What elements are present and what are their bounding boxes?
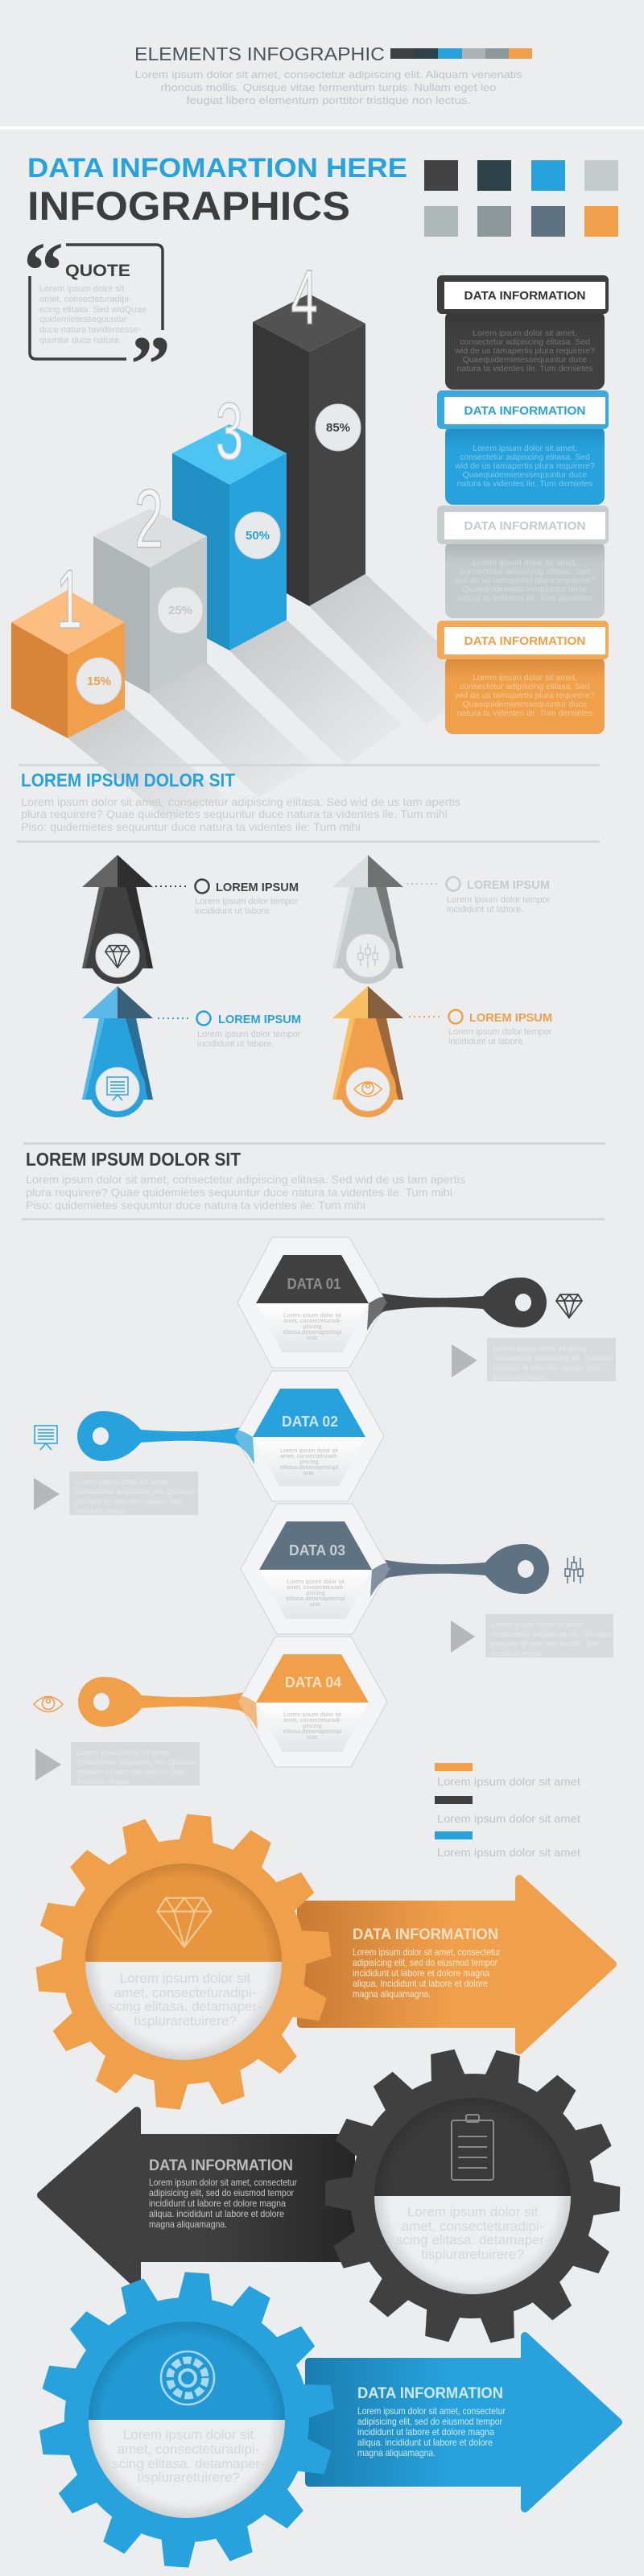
hexagon 4: urar. — [306, 1733, 319, 1740]
header: intro text: feugiat libero elementum porttitor tristique non lectus. — [187, 94, 470, 106]
arrow 4 orange with eye — [332, 986, 403, 1117]
info box 2: Lorem ipsum dolor sit amet, — [75, 1478, 169, 1487]
gear: dark: scing elitasa. detamaper- — [396, 2232, 549, 2248]
arrow: orange data information: magna aliquamagna. — [353, 1988, 431, 2000]
info box 4: consectetur adipiscing elit. Quisque — [76, 1758, 196, 1767]
card 2 blue: Lorem ipsum dolor sit amet, — [473, 444, 577, 453]
bar 1 orange — [11, 552, 125, 738]
hexagon 1: amet, consecteturadi- — [283, 1317, 342, 1324]
header: title: ELEMENTS INFOGRAPHIC — [134, 43, 385, 64]
section text — [21, 795, 460, 833]
label 1: Lorem ipsum dolor tempor — [195, 897, 299, 906]
header: intro text: rhoncus mollis. Quisque vitae fermentum turpis. Nullam eget leo — [161, 81, 496, 93]
label 2: LOREM IPSUM — [467, 878, 550, 892]
quote text: quuntur duce natura. — [39, 336, 122, 345]
label 3: LOREM IPSUM — [218, 1013, 301, 1026]
arrow: dark data information: aliqua. incididunt ut labore et dolore — [149, 2208, 284, 2219]
card 2 blue — [437, 390, 609, 505]
info box 2: posuere id sem nec iaculis. Sed — [75, 1497, 183, 1506]
arrow: orange data information: Lorem ipsum dolor sit amet, consectetur — [353, 1946, 501, 1958]
quote text: scing elitasa. Sed widQuae — [39, 305, 147, 315]
hexagon 3: Lorem ipsum dolor sit — [287, 1578, 345, 1585]
hexagon 2: elitasa.detamapertispl — [280, 1463, 339, 1471]
hexagon 1 — [237, 1237, 386, 1368]
arrow 1 dark with diamond — [82, 855, 153, 984]
info box 1: tincidunt neque. — [493, 1373, 547, 1382]
arrow: dark data information: adipisicing elit, sed do eiusmod tempor — [149, 2187, 294, 2198]
gear: orange: Lorem ipsum dolor sit — [120, 1971, 251, 1986]
info box 1 — [452, 1338, 616, 1382]
3D bar chart — [11, 254, 483, 821]
hexagon 4: piscing — [303, 1722, 322, 1729]
card 1 dark — [437, 275, 609, 390]
section text 2: Piso: quidemietes sequuntur duce natura ta videntes ile: Tum mihi — [26, 1199, 365, 1212]
bar 1 orange: 1 — [56, 552, 82, 646]
bar 2 gray: 25% — [168, 604, 192, 617]
info box 4: posuere id sem nec iaculis. Sed — [76, 1768, 184, 1777]
hexagon 4: DATA 04 — [285, 1674, 341, 1690]
card 3 gray: DATA INFORMATION — [464, 519, 586, 533]
header: intro text: Lorem ipsum dolor sit amet, consectetur adipiscing elit. Aliquam venenatis — [135, 68, 522, 80]
gear: dark: tispluraretuirere? — [421, 2247, 524, 2262]
label 2 — [407, 877, 551, 914]
arrow 2 gray with sliders — [332, 855, 403, 984]
icon: sliders pin 3 — [565, 1556, 583, 1583]
arrow: blue data information: incididunt ut labore et dolore magna — [357, 2426, 494, 2438]
arrow: blue data information: magna aliquamagna. — [357, 2447, 436, 2458]
info box 3 — [451, 1614, 613, 1658]
arrow 3 blue with board — [82, 986, 153, 1117]
info box 3: tincidunt neque. — [491, 1649, 545, 1658]
card 2 blue: Quaequidemietessequuntur duce — [463, 470, 587, 480]
bar 3 blue: 3 — [216, 386, 243, 477]
section text: plura requirere? Quae quidemietes sequuntur duce natura ta videntes ile. Tum mihi — [21, 807, 448, 820]
card 1 dark: consectetur adipiscing elitasa. Sed — [460, 337, 590, 347]
card 2 blue: natura ta videntes ile. Tum demietes — [457, 479, 592, 489]
bar 3 blue — [172, 386, 287, 650]
gear: dark: amet, consecteturadipi- — [402, 2219, 543, 2234]
arrow: blue data information: aliqua. incididunt ut labore et dolore — [357, 2437, 493, 2448]
hexagon 1: urar. — [306, 1334, 319, 1341]
section text: Piso: quidemietes sequuntur duce natura ta videntes ile: Tum mihi — [21, 820, 361, 833]
bar 2 gray: 2 — [134, 473, 163, 566]
section heading: lorem ipsum dolor sit (dark): LOREM IPSUM DOLOR SIT — [26, 1149, 241, 1170]
hexagon 3: piscing — [306, 1589, 325, 1596]
arrow: dark data information: magna aliquamagna. — [149, 2219, 227, 2230]
heading: infographics: INFOGRAPHICS — [27, 184, 350, 229]
info box 2: consectetur adipiscing elit. Quisque — [75, 1488, 195, 1496]
icon: eye pin 4 — [34, 1697, 63, 1711]
gear: orange — [22, 1800, 345, 2124]
section text 2: plura requirere? Quae quidemietes sequuntur duce natura ta videntes ile. Tum mihi — [26, 1186, 452, 1199]
hexagon 1: elitasa.detamapertispl — [283, 1328, 342, 1335]
label 3 — [158, 1011, 301, 1049]
arrow: orange data information: aliqua. Incididunt ut labore et dolore — [353, 1978, 488, 1989]
hexagon 2: amet, consecteturadi- — [280, 1452, 339, 1459]
card 3 gray — [437, 506, 609, 618]
label 1: LOREM IPSUM — [216, 881, 299, 894]
label 4: incididunt ut labore. — [448, 1037, 525, 1046]
card 3 gray: wid de us tamapertis plura requirere? — [454, 576, 595, 585]
info box 2 — [34, 1472, 198, 1516]
quote text: duce natura tavidentesse- — [39, 325, 142, 335]
hexagon 4: Lorem ipsum dolor sit — [283, 1711, 342, 1718]
card 2 blue: wid de us tamapertis plura requirere? — [454, 461, 595, 471]
header: title — [134, 43, 532, 64]
card 1 dark: Quaequidemietessequuntur duce — [463, 355, 587, 365]
info box 1: consectetur adipiscing elit. Quisque — [493, 1354, 613, 1363]
label 2: incididunt ut labore. — [447, 905, 523, 914]
label 1: incididunt ut labore. — [195, 906, 271, 916]
label 3: incididunt ut labore. — [197, 1039, 274, 1049]
card 1 dark: natura ta videntes ile. Tum demietes — [457, 364, 592, 374]
bar 2 gray — [93, 473, 207, 694]
gear: blue: amet, consecteturadipi- — [118, 2442, 259, 2457]
hexagon 1: piscing — [303, 1323, 322, 1330]
hexagon 3: DATA 03 — [289, 1542, 345, 1558]
arrow: blue data information — [309, 2336, 618, 2508]
hexagon 4: elitasa.detamapertispl — [283, 1728, 342, 1735]
legend: Lorem ipsum dolor sit amet — [437, 1812, 580, 1825]
gear: orange: scing elitasa. detamaper- — [109, 1999, 262, 2014]
bar 1 orange: 15% — [87, 675, 111, 688]
card 1 dark: DATA INFORMATION — [464, 289, 586, 303]
hexagon 4: amet, consecteturadi- — [283, 1716, 342, 1724]
quote text: quidemietessequuntur — [39, 315, 127, 324]
pin 3 slate — [369, 1544, 549, 1594]
section text: Lorem ipsum dolor sit amet, consectetur adipiscing elitasa. Sed wid de us tam apertis — [21, 795, 460, 808]
icon: close quote: ” — [130, 320, 171, 409]
quote box — [23, 225, 171, 409]
card 3 gray: Quaequidemietessequuntur duce — [463, 584, 587, 594]
section text 2 — [26, 1173, 465, 1212]
arrow: orange data information — [301, 1879, 613, 2050]
label 1 — [155, 879, 299, 916]
gear: blue: tispluraretuirere? — [137, 2470, 240, 2485]
pin 4 orange — [78, 1677, 258, 1727]
heading: data information here: DATA INFOMARTION HERE — [27, 153, 407, 184]
card 3 gray: consectetur adipiscing elitasa. Sed — [460, 567, 590, 576]
info box 4 — [35, 1742, 200, 1786]
hexagon 4 — [238, 1637, 387, 1767]
section heading: lorem ipsum dolor sit (blue): LOREM IPSUM DOLOR SIT — [21, 770, 235, 791]
hexagon 1: Lorem ipsum dolor sit — [283, 1311, 342, 1319]
hexagon 3 — [241, 1504, 390, 1634]
pin 2 blue — [77, 1411, 258, 1461]
gear: blue: Lorem ipsum dolor sit — [123, 2427, 254, 2442]
hexagon 2 — [235, 1371, 384, 1501]
card 4 orange: DATA INFORMATION — [464, 634, 586, 648]
gear: orange: amet, consecteturadipi- — [114, 1985, 256, 2000]
label 4 — [409, 1009, 552, 1046]
bar 4 dark: 85% — [326, 421, 350, 435]
arrow: dark data information: DATA INFORMATION — [149, 2157, 293, 2174]
legend: Lorem ipsum dolor sit amet — [437, 1775, 580, 1788]
gear: dark: Lorem ipsum dolor sit — [407, 2204, 539, 2219]
info box 4: tincidunt neque. — [76, 1777, 130, 1786]
card 3 gray: natura ta videntes ile. Tum demietes — [457, 593, 592, 603]
card 2 blue: consectetur adipiscing elitasa. Sed — [460, 452, 590, 462]
bar 4 dark — [253, 254, 365, 606]
gear: blue: scing elitasa. detamaper- — [112, 2456, 265, 2471]
hexagon 2: piscing — [299, 1458, 319, 1465]
header: colour bar — [390, 48, 532, 59]
hexagon 1: DATA 01 — [287, 1276, 341, 1292]
card 4 orange: consectetur adipiscing elitasa. Sed — [460, 682, 590, 691]
label 2: Lorem ipsum dolor tempor — [447, 895, 551, 905]
card 4 orange — [437, 621, 609, 734]
hexagon 2: urar. — [303, 1469, 316, 1476]
info box 4: Lorem ipsum dolor sit amet, — [76, 1748, 171, 1757]
hexagon 3: urar. — [309, 1600, 322, 1608]
label 3: Lorem ipsum dolor tempor — [197, 1030, 301, 1039]
section text 2: Lorem ipsum dolor sit amet, consectetur adipiscing elitasa. Sed wid de us tam apertis — [26, 1173, 465, 1186]
arrow: orange data information: DATA INFORMATION — [353, 1926, 498, 1943]
gear: dark — [294, 2017, 644, 2375]
card 4 orange: natura ta videntes ile. Tum demietes — [457, 708, 592, 718]
card 4 orange: Quaequidemietessequuntur duce — [463, 700, 587, 709]
card 1 dark: Lorem ipsum dolor sit amet, — [473, 328, 577, 338]
label 4: Lorem ipsum dolor tempor — [448, 1027, 552, 1037]
info box 1: Lorem ipsum dolor sit amet, — [493, 1344, 587, 1353]
icon: presentation board pin 2 — [35, 1426, 57, 1450]
info box 3: posuere id sem nec iaculis. Sed — [491, 1640, 599, 1649]
icon: open quote: “ — [23, 225, 64, 315]
info box 1: posuere id sem nec iaculis. Sed — [493, 1364, 601, 1373]
data cards — [437, 275, 609, 734]
bar 4 dark: 4 — [291, 254, 318, 340]
arrow: dark data information: Lorem ipsum dolor sit amet, consectetur — [149, 2177, 297, 2188]
arrow: dark data information — [41, 2111, 351, 2285]
bar shadows — [68, 574, 483, 821]
label 4: LOREM IPSUM — [469, 1011, 552, 1025]
card 3 gray: Lorem ipsum dolor sit amet, — [473, 558, 577, 568]
hexagon 2: DATA 02 — [282, 1414, 338, 1430]
colour swatches — [424, 160, 618, 237]
card 1 dark: wid de us tamapertis plura requirere? — [454, 346, 595, 356]
quote text: amet, consecteturadipi- — [39, 295, 132, 304]
arrow: dark data information: incididunt ut labore et dolore magna — [149, 2198, 286, 2209]
card 2 blue: DATA INFORMATION — [464, 404, 586, 418]
header: intro text — [135, 68, 522, 106]
hexagon 3: amet, consecteturadi- — [287, 1583, 345, 1591]
hexagon 2: Lorem ipsum dolor sit — [280, 1447, 339, 1454]
quote title: QUOTE — [65, 262, 130, 280]
quote text — [39, 284, 147, 345]
card 4 orange: wid de us tamapertis plura requirere? — [454, 691, 595, 700]
legend — [435, 1763, 580, 1859]
gear: orange: tispluraretuirere? — [134, 2013, 237, 2029]
arrow: orange data information: incididunt ut labore et dolore magna — [353, 1967, 489, 1979]
info box 3: consectetur adipiscing elit. Quisque — [491, 1630, 611, 1639]
card 4 orange: Lorem ipsum dolor sit amet, — [473, 673, 577, 683]
arrow: blue data information: adipisicing elit, sed do eiusmod tempor — [357, 2416, 502, 2427]
arrow: blue data information: DATA INFORMATION — [357, 2385, 503, 2402]
legend: Lorem ipsum dolor sit amet — [437, 1846, 580, 1859]
icon: diamond pin 1 — [556, 1294, 582, 1318]
hexagon 3: elitasa.detamapertispl — [287, 1595, 345, 1602]
gear: blue — [29, 2263, 345, 2576]
info box 2: tincidunt neque. — [75, 1507, 129, 1516]
arrow: blue data information: Lorem ipsum dolor sit amet, consectetur — [357, 2405, 506, 2417]
bar 3 blue: 50% — [246, 529, 270, 543]
quote text: Lorem ipsum dolor sit — [39, 284, 124, 294]
arrow: orange data information: adipisicing elit, sed do eiusmod tempor — [353, 1957, 497, 1968]
info box 3: Lorem ipsum dolor sit amet, — [491, 1620, 585, 1629]
pin 1 dark — [366, 1278, 547, 1327]
